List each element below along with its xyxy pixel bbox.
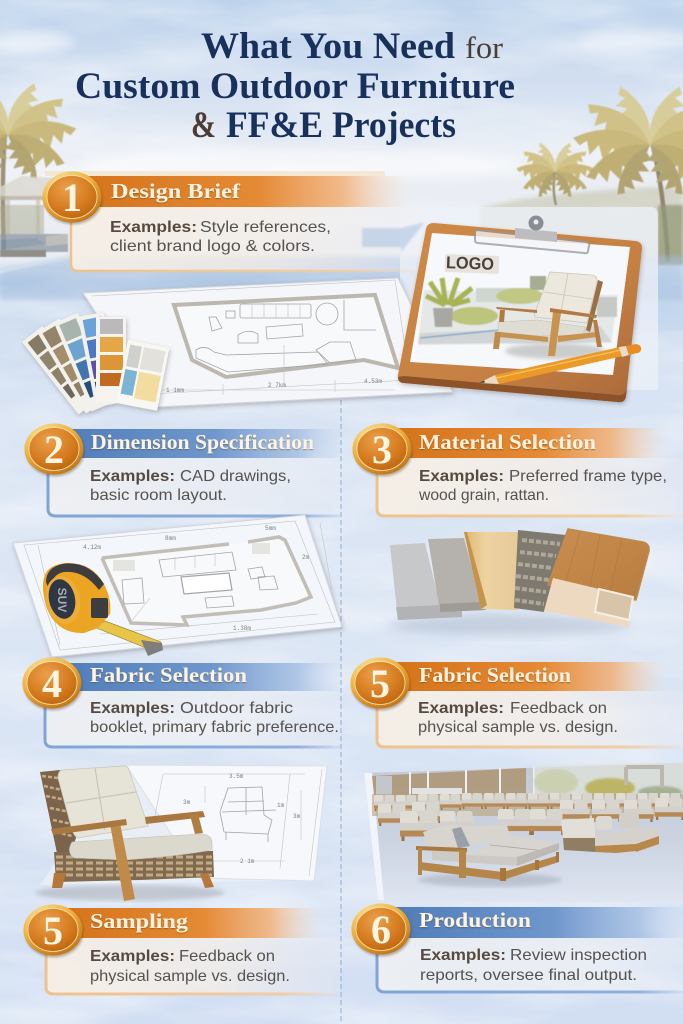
- chair with technical sketch: 3m: [183, 799, 191, 806]
- chair with technical sketch: 2 1m: [240, 858, 255, 865]
- logo tag: LOGO: [446, 253, 494, 274]
- floor plan sheet: [83, 278, 453, 407]
- panel: step 3 material selection: [352, 424, 683, 517]
- panel: step 1 design brief: 1: [62, 175, 82, 220]
- panel: step 6 production: [352, 904, 683, 993]
- clip: [475, 216, 589, 253]
- panel: step 6 production: Review inspection: [510, 947, 647, 964]
- panel: step 4 fabric selection: Fabric Selection: [90, 663, 247, 687]
- panel: step 6 production: 6: [371, 907, 391, 952]
- concept scene: [418, 276, 618, 345]
- panel: step 5 fabric selection: 5: [370, 661, 390, 706]
- title: for: [465, 30, 504, 65]
- panel: step 2 dimension specification: basic room layout.: [90, 487, 227, 504]
- floor plan sheet: 4.53m: [364, 378, 382, 385]
- title: What You Need: [201, 26, 455, 67]
- clipboard with chair concept: [398, 216, 642, 402]
- title: FF&E Projects: [226, 105, 456, 146]
- panel: step 4 fabric selection: [22, 658, 340, 748]
- floor plan with tape measure: 8mm: [165, 535, 176, 542]
- panel: step 3 material selection: Preferred frame type,: [509, 468, 667, 485]
- divider: [340, 392, 342, 1024]
- palm left: [0, 79, 78, 250]
- panel: step 5 sampling: [24, 904, 340, 995]
- title: Custom Outdoor Furniture: [75, 66, 515, 107]
- panel: step 1 design brief: Style references,: [200, 219, 331, 236]
- panel: step 3 material selection: wood grain, rattan.: [418, 487, 549, 504]
- panel: step 4 fabric selection: 4: [42, 661, 62, 706]
- tape measure: [41, 563, 163, 656]
- panel: step 5 fabric selection: Examples:: [418, 700, 504, 717]
- panel: step 5 sampling: physical sample vs. design.: [90, 968, 290, 985]
- color swatches: [22, 312, 169, 414]
- panel: step 2 dimension specification: Examples:: [90, 468, 175, 485]
- chair on clipboard: [493, 272, 605, 359]
- chair with technical sketch: [35, 765, 327, 901]
- chair with technical sketch: 3.5m: [229, 773, 244, 780]
- panel: step 1 design brief: client brand logo & colors.: [110, 238, 315, 255]
- panel: step 5 fabric selection: physical sample vs. design.: [418, 719, 618, 736]
- floor plan sheet: 2 7km: [268, 382, 286, 389]
- panel: step 2 dimension specification: 2: [44, 427, 64, 472]
- panel: step 5 fabric selection: [350, 658, 683, 748]
- panel: step 3 material selection: Examples:: [419, 468, 504, 485]
- panel: step 5 fabric selection: Feedback on: [510, 700, 607, 717]
- panel: step 6 production: Examples:: [420, 947, 506, 964]
- back rows of seating: [374, 793, 683, 841]
- chair with technical sketch: 3m: [293, 813, 301, 820]
- panel: step 2 dimension specification: [24, 424, 340, 517]
- pool water: [0, 256, 683, 300]
- panel: step 5 sampling: Examples:: [90, 948, 175, 965]
- panel: step 4 fabric selection: Outdoor fabric: [180, 700, 293, 717]
- panel: step 2 dimension specification: Dimension Specification: [91, 430, 314, 454]
- panel: step 4 fabric selection: booklet, primary fabric preference.: [90, 719, 339, 736]
- panel: step 1 design brief: Examples:: [110, 219, 197, 236]
- panel: step 5 fabric selection: Fabric Selection: [419, 663, 571, 687]
- material samples: [390, 529, 649, 635]
- paper sheet: [410, 233, 630, 375]
- panel: step 5 sampling: Feedback on: [179, 948, 275, 965]
- panel: step 3 material selection: Material Selection: [419, 430, 596, 454]
- panel: step 1 design brief: Design Brief: [111, 179, 241, 203]
- panel: step 5 sampling: Sampling: [90, 909, 189, 933]
- floor plan with tape measure: 2m: [302, 554, 310, 561]
- front sofa: [416, 825, 562, 887]
- patio scene with rows of furniture: [364, 762, 683, 902]
- tape measure: SUV: [55, 588, 69, 612]
- palms and trees right: [480, 82, 683, 265]
- title: [75, 26, 515, 146]
- pavilion and loungers left: [0, 176, 70, 272]
- panel: step 6 production: Production: [419, 908, 531, 932]
- mid sofa right: [561, 813, 660, 853]
- panel: step 2 dimension specification: CAD drawings,: [180, 468, 291, 485]
- panel: step 6 production: reports, oversee final output.: [420, 967, 637, 984]
- chair with technical sketch: 1m: [277, 802, 285, 809]
- panel: step 5 sampling: 5: [43, 908, 63, 953]
- panel: step 4 fabric selection: Examples:: [90, 700, 175, 717]
- floor plan with tape measure: 5mm: [265, 525, 276, 532]
- panel: step 3 material selection: 3: [372, 427, 392, 472]
- panel: step 1 design brief: [42, 171, 425, 272]
- floor plan with tape measure: 1.38m: [233, 625, 251, 632]
- pencil: [479, 344, 641, 384]
- chair: [35, 766, 225, 901]
- title: &: [191, 105, 216, 146]
- floor plan with tape measure: [13, 515, 342, 657]
- floor plan sheet: 1 1mm: [166, 387, 184, 394]
- floor plan with tape measure: 4.12m: [83, 544, 101, 551]
- panel: backdrop behind clipboard: [400, 207, 658, 390]
